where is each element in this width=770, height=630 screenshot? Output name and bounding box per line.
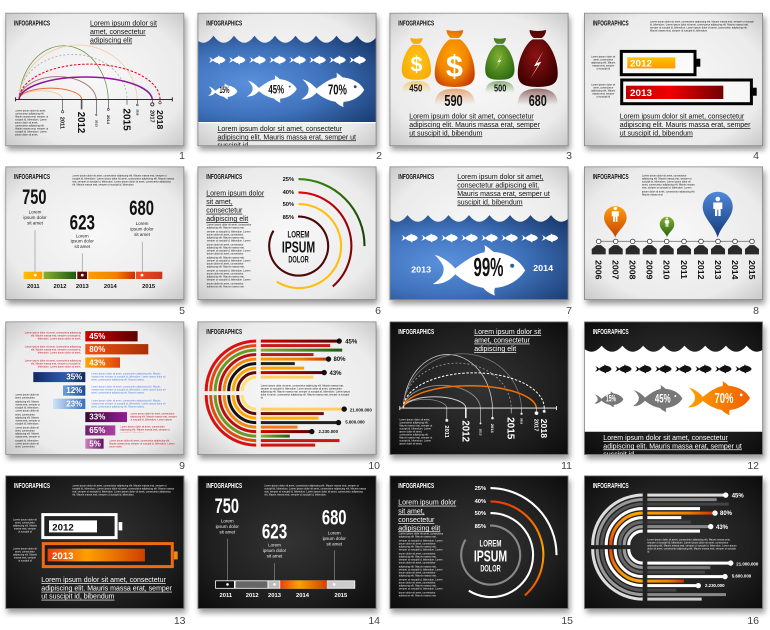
center text: LOREM <box>480 538 502 548</box>
body text: adipiscing elit. Mauris massa erat, semper ut <box>603 443 742 450</box>
body text: suscipit id <box>603 452 634 459</box>
slide 5: color timeline <box>5 166 184 300</box>
bar year labels: 2012 <box>246 593 259 599</box>
intro text: amet, consectetur <box>474 338 531 345</box>
slide 13: dark batteries <box>5 475 184 609</box>
page number 5: 5 <box>179 305 185 317</box>
body text: Lorem ipsum dolor sit amet, consectetur <box>41 577 166 584</box>
intro text <box>398 500 457 532</box>
slide 10: rainbow rings and bars <box>198 321 376 455</box>
arc labels <box>475 486 486 530</box>
body text: adipiscing elit. Mauris massa erat, semper <box>409 122 541 129</box>
body text <box>603 435 742 459</box>
intro text: sit amet, <box>206 199 233 206</box>
slide 9: percentage bars <box>5 321 184 455</box>
year labels: 2015 <box>120 108 131 131</box>
year labels: 2017 <box>148 110 154 123</box>
body text: ut suscipit id, bibendum <box>620 130 693 137</box>
fish 15% <box>594 391 623 407</box>
radial arcs <box>461 488 557 597</box>
battery 2013: 2013 <box>630 88 652 98</box>
body text: adipiscing elit. Mauris massa erat, semper <box>41 586 173 593</box>
rings <box>206 341 256 445</box>
axis <box>16 97 172 101</box>
intro text: amet, consectetur <box>90 29 146 36</box>
bar year labels: 2012 <box>54 284 66 290</box>
stat 623: ipsum dolor <box>263 548 287 553</box>
page number 13: 13 <box>174 615 186 627</box>
body text: Mauris massa erat, semper ut <box>457 191 550 198</box>
top paragraph: Lorem ipsum dolor sit amet, consectetur adipiscing elit. Mauris massa erat, semper ut suscipit id, bibendum. Lorem ipsum dolor sit amet, consectetur adipiscing elit. Mauris massa erat, semper ut suscipit id, bibendum. Lorem ipsum dolor sit amet, consectetur adipiscing elit. Mauris massa erat, semper ut suscipit id, bibendum. <box>72 484 174 497</box>
green bag 500 <box>485 38 514 93</box>
bar end dots <box>309 338 347 434</box>
bag values: 590 <box>444 93 463 110</box>
page number 11: 11 <box>561 460 572 472</box>
bar labels: 45% <box>345 340 358 346</box>
slide 8: pin timeline <box>584 166 763 300</box>
body text: consectetur adipiscing elit. <box>457 183 539 190</box>
timeline years: 2010 <box>662 260 672 280</box>
stat 750: sit amet <box>27 220 44 225</box>
heading: INFOGRAPHICS <box>593 20 629 27</box>
intro text: adipiscing elit <box>398 525 440 532</box>
heading: INFOGRAPHICS <box>206 483 242 490</box>
paragraph: Lorem ipsum dolor sit amet, consectetur adipiscing elit. Mauris massa erat, semper ut suscipit id, bibendum. Lorem ipsum dolor sit amet, consectetur adipiscing elit. Mauris massa erat, semper ut suscipit id, bibendum. Lorem ipsum dolor sit amet, consectetur adipiscing elit. Mauris massa erat. <box>642 175 695 196</box>
year labels: 2018 <box>539 419 549 438</box>
blue note 2: Lorem ipsum dolor sit amet, consectetur adipiscing elit. Mauris massa erat, semper ut suscipit id, bibendum. Lorem ipsum dolor sit amet, consectetur adipiscing elit. Mauris massa. <box>91 385 166 394</box>
heading: INFOGRAPHICS <box>206 20 242 27</box>
year labels: 2012 <box>75 112 86 133</box>
stat 680: 680 <box>322 507 347 530</box>
bar year labels: 2011 <box>220 593 233 599</box>
bar percentages: 35% <box>66 373 82 382</box>
slide 14: dark color timeline <box>198 475 376 609</box>
stat 680: Lorem <box>136 221 149 226</box>
side note 2012: Lorem ipsum dolor sit amet, consectetur adipiscing elit. Mauris massa erat, semper ut suscipit id <box>13 518 37 533</box>
center text: DOLOR <box>480 563 501 573</box>
center text: IPSUM <box>474 548 507 565</box>
page number 1: 1 <box>179 150 185 162</box>
battery 2013 <box>622 80 757 104</box>
stat 680: 680 <box>129 197 154 220</box>
bar labels: 5.600.000 <box>345 420 365 425</box>
bar labels: 5.600.000 <box>732 574 752 579</box>
fish 70%: 70% <box>714 391 734 407</box>
timeline years <box>594 260 757 280</box>
slide 6: concentric arcs <box>198 166 376 300</box>
page number 7: 7 <box>566 305 572 317</box>
stat 750 <box>22 186 47 273</box>
arc labels: 85% <box>283 215 294 221</box>
axis <box>400 406 556 410</box>
stat 750: ipsum dolor <box>23 215 47 220</box>
arc labels: 85% <box>475 524 486 530</box>
blue note 1: Lorem ipsum dolor sit amet, consectetur adipiscing elit. Mauris massa erat, semper ut suscipit id, bibendum. Lorem ipsum dolor sit amet, consectetur adipiscing elit. Mauris massa. <box>91 372 166 381</box>
side note 2013: Lorem ipsum dolor sit amet, consectetur adipiscing elit. Mauris massa erat, semper ut suscipit id <box>591 83 615 98</box>
timeline years: 2009 <box>645 260 655 280</box>
years: 2013 <box>411 265 431 275</box>
page number 15: 15 <box>561 615 573 627</box>
body text: Lorem ipsum dolor sit amet, consectetur <box>409 114 534 121</box>
page number 12: 12 <box>747 460 759 472</box>
bar percentages: 80% <box>89 345 105 354</box>
bar labels: 21.000.000 <box>350 407 372 412</box>
bar percentages: 23% <box>66 399 82 408</box>
row of small fish <box>401 233 558 243</box>
bar labels: 2.230.000 <box>318 429 339 434</box>
stat 623: 623 <box>70 211 95 234</box>
page number 16: 16 <box>747 615 759 627</box>
body text: suscipit id <box>218 143 248 150</box>
intro text: consectetur <box>206 208 243 215</box>
bar year labels: 2013 <box>76 284 90 290</box>
bar year labels: 2014 <box>296 593 310 599</box>
fish 45% <box>633 385 682 412</box>
heading: INFOGRAPHICS <box>206 329 242 336</box>
intro text: adipiscing elit <box>90 37 132 44</box>
arc labels: 50% <box>475 511 486 517</box>
stat 680: sit amet <box>134 232 151 237</box>
fish 15%: 15% <box>606 393 616 403</box>
timeline years: 2013 <box>713 260 723 280</box>
big fish 99% <box>433 245 525 296</box>
page number 8: 8 <box>753 305 759 317</box>
page number 14: 14 <box>368 615 380 627</box>
year labels: 2016 <box>135 109 139 116</box>
stat 750: 750 <box>215 495 239 518</box>
years: 2014 <box>533 263 553 273</box>
stat 750: 750 <box>22 186 46 209</box>
timeline years: 2008 <box>628 260 638 280</box>
heading: INFOGRAPHICS <box>206 174 242 181</box>
body text <box>218 126 356 150</box>
body text: Lorem ipsum dolor sit amet, <box>457 174 544 181</box>
heading: INFOGRAPHICS <box>398 20 434 27</box>
stat 750: Lorem <box>221 519 234 524</box>
bars <box>33 331 148 449</box>
intro text: sit amet, <box>398 508 425 515</box>
year labels: 2016 <box>520 418 524 425</box>
bar percentages: 33% <box>89 413 105 422</box>
year labels <box>59 108 165 133</box>
body text: ut suscipit id, bibendum <box>41 594 115 601</box>
bar labels <box>705 494 759 588</box>
bar labels: 43% <box>330 371 342 377</box>
pin green <box>660 217 674 237</box>
year stems and markers <box>61 100 161 115</box>
body text <box>620 114 751 137</box>
fish 45% <box>247 75 297 103</box>
intro text: Lorem ipsum dolor <box>398 500 457 507</box>
bar labels: 80% <box>334 357 346 363</box>
bar labels: 43% <box>716 525 729 531</box>
slide 1: arc timeline <box>5 12 184 146</box>
years <box>411 263 553 275</box>
year stems and markers <box>446 408 545 424</box>
radial arcs <box>269 179 365 288</box>
yellow bag 450: $ <box>410 53 422 77</box>
center paragraph: Lorem ipsum dolor sit amet, consectetur adipiscing elit. Mauris massa erat, semper ut suscipit id, bibendum. Lorem ipsum dolor sit amet, consectetur adipiscing elit. Mauris massa erat, semper ut suscipit id, bibendum. Lorem ipsum dolor sit amet, consectetur adipiscing elit. Mauris massa erat, semper ut suscipit id. <box>261 384 350 400</box>
stat 623 <box>262 521 287 580</box>
center text <box>282 229 315 264</box>
fish 70% <box>301 73 364 107</box>
year labels: 2018 <box>155 110 165 129</box>
heading: INFOGRAPHICS <box>593 483 629 490</box>
icon: green bolt <box>495 53 503 70</box>
arc labels: 25% <box>283 177 294 183</box>
slide 7: big fish <box>390 166 568 300</box>
heading: INFOGRAPHICS <box>14 174 50 181</box>
bar year labels: 2013 <box>268 593 282 599</box>
bar labels: 45% <box>732 494 744 500</box>
body text: adipiscing elit. Mauris massa erat, semper ut <box>218 134 356 141</box>
page number 4: 4 <box>753 150 759 162</box>
bag values: 500 <box>494 83 507 94</box>
top paragraph: Lorem ipsum dolor sit amet, consectetur adipiscing elit. Mauris massa erat, semper ut suscipit id, bibendum. Lorem ipsum dolor sit amet, consectetur adipiscing elit. Mauris massa erat, semper ut suscipit id, bibendum. Lorem ipsum dolor sit amet, consectetur adipiscing elit. Mauris massa erat, semper ut suscipit id, bibendum. <box>650 21 754 33</box>
fish 70%: 70% <box>328 83 347 99</box>
year labels: 2015 <box>505 417 516 440</box>
center text: DOLOR <box>288 254 309 264</box>
slide 16: dark rings and bars <box>584 475 763 609</box>
fish 45%: 45% <box>655 391 671 405</box>
intro text <box>206 190 265 223</box>
bar percentages: 5% <box>89 439 101 448</box>
heading: INFOGRAPHICS <box>593 329 629 336</box>
body text <box>41 577 173 601</box>
arc labels <box>283 177 294 221</box>
intro text: adipiscing elit <box>206 216 248 223</box>
bar year labels: 2014 <box>104 284 118 290</box>
bag values: 450 <box>409 83 423 94</box>
big fish 99%: 99% <box>474 252 504 282</box>
stat 680: Lorem <box>328 531 341 536</box>
year labels <box>443 417 549 442</box>
battery 2013 <box>43 544 178 567</box>
arcs <box>19 45 160 99</box>
heading: INFOGRAPHICS <box>14 20 50 27</box>
stat 680: ipsum dolor <box>323 536 346 541</box>
stat 680 <box>129 197 154 273</box>
bar year labels <box>27 284 156 290</box>
battery 2012 <box>621 51 700 75</box>
stat 623: Lorem <box>268 543 281 548</box>
slide 12: fish dark and orange <box>584 321 763 459</box>
bar labels: 21.000.000 <box>736 561 759 566</box>
year labels: 2011 <box>443 425 449 438</box>
stat 750: ipsum dolor <box>216 524 239 529</box>
timeline years: 2012 <box>696 260 706 280</box>
stat 623: 623 <box>262 521 287 544</box>
segmented bar <box>24 272 162 279</box>
bar percentages: 12% <box>66 386 82 395</box>
stat 680: ipsum dolor <box>130 227 154 232</box>
body text: Lorem ipsum dolor sit amet, consectetur <box>620 114 745 121</box>
page number 10: 10 <box>368 460 380 472</box>
bar labels: 80% <box>720 511 733 517</box>
bar labels <box>318 340 372 434</box>
bar year labels: 2015 <box>142 284 156 290</box>
year labels: 2013 <box>94 120 98 127</box>
bar end dots <box>696 492 733 588</box>
bar year labels <box>220 593 348 599</box>
heading: INFOGRAPHICS <box>14 483 50 490</box>
row of small fish <box>209 55 366 65</box>
body text: suscipit id, bibendum <box>457 199 523 206</box>
fish 15%: 15% <box>220 85 230 95</box>
year labels: 2013 <box>478 429 482 436</box>
bag values: 680 <box>529 93 547 110</box>
bar year labels: 2011 <box>27 284 40 290</box>
water with waves <box>193 36 398 122</box>
timeline years: 2006 <box>594 260 604 280</box>
page number 9: 9 <box>179 460 185 472</box>
page number 2: 2 <box>376 150 382 162</box>
year labels: 2011 <box>59 117 65 129</box>
heading: INFOGRAPHICS <box>398 329 434 336</box>
timeline years: 2015 <box>747 260 757 280</box>
icon: red bolt <box>530 51 543 79</box>
orange bag 590 <box>435 30 475 105</box>
stat 623: ipsum dolor <box>71 239 94 244</box>
year labels: 2017 <box>532 419 538 431</box>
stat 623 <box>70 211 95 273</box>
bar labels: 2.230.000 <box>705 583 725 588</box>
arc labels: 40% <box>475 499 486 505</box>
slide 4: batteries <box>584 12 763 146</box>
arc labels: 50% <box>283 202 294 208</box>
center text: IPSUM <box>282 239 315 256</box>
year labels: 2014 <box>490 424 495 433</box>
bars <box>647 494 730 601</box>
slide 15: dark concentric arcs <box>390 475 568 609</box>
bars <box>261 340 344 447</box>
stat 750 <box>215 495 239 582</box>
center text <box>474 538 507 573</box>
bag values <box>409 83 547 110</box>
slide 3: money bags <box>390 12 568 146</box>
body text: ut suscipit id, bibendum <box>409 130 483 137</box>
body text: Lorem ipsum dolor sit amet, consectetur <box>218 126 343 133</box>
bar percentages <box>66 332 105 448</box>
stat 623: sit amet <box>74 244 91 249</box>
yellow bag 450 <box>402 38 431 93</box>
body text <box>457 174 550 206</box>
page number 3: 3 <box>566 150 572 162</box>
year labels: 2014 <box>106 115 111 125</box>
row of black fish <box>595 364 752 374</box>
bar percentages: 45% <box>89 332 105 341</box>
arc labels: 25% <box>475 486 486 492</box>
battery 2013: 2013 <box>52 551 73 561</box>
center paragraph: Lorem ipsum dolor sit amet, consectetur adipiscing elit. Mauris massa erat, semper ut suscipit id, bibendum. Lorem ipsum dolor sit amet, consectetur adipiscing elit. Mauris massa erat, semper ut suscipit id, bibendum. Lorem ipsum dolor sit amet, consectetur adipiscing elit. Mauris massa erat, semper ut suscipit id. <box>647 538 737 554</box>
year labels: 2012 <box>459 420 470 442</box>
page number 6: 6 <box>375 305 381 317</box>
timeline years: 2011 <box>679 260 689 279</box>
body text: adipiscing elit. Mauris massa erat, semper <box>620 122 751 129</box>
white water with waves <box>581 346 767 432</box>
intro text: consectetur <box>398 517 435 524</box>
segmented bar <box>215 580 355 589</box>
water with waves <box>387 215 592 300</box>
red note 4: Lorem ipsum dolor sit amet, consectetur adipiscing elit. Mauris massa erat, semper ut suscipit id, bibendum. Lorem ipsum. <box>130 412 177 421</box>
side note 2013: Lorem ipsum dolor sit amet, consectetur adipiscing elit. Mauris massa erat, semper ut suscipit id <box>13 547 37 562</box>
fish 15% <box>208 83 237 99</box>
bar year labels: 2015 <box>334 593 348 599</box>
rings <box>593 495 643 599</box>
fish 45%: 45% <box>268 82 284 96</box>
heading: INFOGRAPHICS <box>593 174 629 181</box>
arc labels: 40% <box>283 190 294 196</box>
stat 623: sit amet <box>267 553 283 558</box>
top paragraph: Lorem ipsum dolor sit amet, consectetur adipiscing elit. Mauris massa erat, semper ut suscipit id, bibendum. Lorem ipsum dolor sit amet, consectetur adipiscing elit. Mauris massa erat, semper ut suscipit id, bibendum. Lorem ipsum dolor sit amet, consectetur adipiscing elit. Mauris massa erat, semper ut suscipit id, bibendum. <box>264 484 366 497</box>
stat 623: Lorem <box>76 233 89 238</box>
body text <box>409 114 541 137</box>
pin blue <box>703 192 733 237</box>
intro text: Lorem ipsum dolor sit <box>474 329 541 336</box>
side note 2012: Lorem ipsum dolor sit amet, consectetur adipiscing elit. Mauris massa erat, semper ut suscipit id <box>591 56 615 71</box>
battery 2012 <box>43 515 122 538</box>
timeline nodes <box>592 239 759 254</box>
stat 680: sit amet <box>326 541 343 546</box>
orange bag 590: $ <box>446 50 463 84</box>
heading: INFOGRAPHICS <box>398 483 434 490</box>
stat 680 <box>322 507 347 580</box>
intro text: Lorem ipsum dolor <box>206 190 265 197</box>
intro text: adipiscing elit <box>474 346 516 353</box>
heading: INFOGRAPHICS <box>398 174 434 181</box>
slide 2: fish in water <box>198 12 376 150</box>
blue note 3: Lorem ipsum dolor sit amet, consectetur adipiscing elit. Mauris massa erat, semper ut suscipit id, bibendum. Lorem ipsum dolor sit amet, consectetur adipiscing elit. Mauris massa. <box>91 399 166 408</box>
stat 750: sit amet <box>219 529 236 534</box>
bar percentages: 65% <box>89 426 105 435</box>
body text: Lorem ipsum dolor sit amet, consectetur <box>603 435 728 442</box>
bar percentages: 43% <box>89 359 105 368</box>
intro text <box>474 329 541 353</box>
intro text: Lorem ipsum dolor sit <box>90 20 157 27</box>
pin orange <box>604 206 627 237</box>
fish 70% <box>688 381 750 415</box>
battery 2012: 2012 <box>630 59 652 69</box>
top paragraph: Lorem ipsum dolor sit amet, consectetur adipiscing elit. Mauris massa erat, semper ut suscipit id, bibendum. Lorem ipsum dolor sit amet, consectetur adipiscing elit. Mauris massa erat, semper ut suscipit id, bibendum. Lorem ipsum dolor sit amet, consectetur adipiscing elit. Mauris massa erat, semper ut suscipit id, bibendum. <box>72 175 174 187</box>
intro text <box>90 20 157 44</box>
timeline years: 2014 <box>730 260 740 280</box>
stat 750: Lorem <box>29 210 42 215</box>
timeline years: 2007 <box>611 260 621 280</box>
slide 11: dark arc timeline <box>390 321 568 455</box>
dark red bag 680 <box>518 30 558 105</box>
battery 2012: 2012 <box>52 522 74 532</box>
arcs <box>403 354 544 408</box>
center text: LOREM <box>288 229 310 239</box>
